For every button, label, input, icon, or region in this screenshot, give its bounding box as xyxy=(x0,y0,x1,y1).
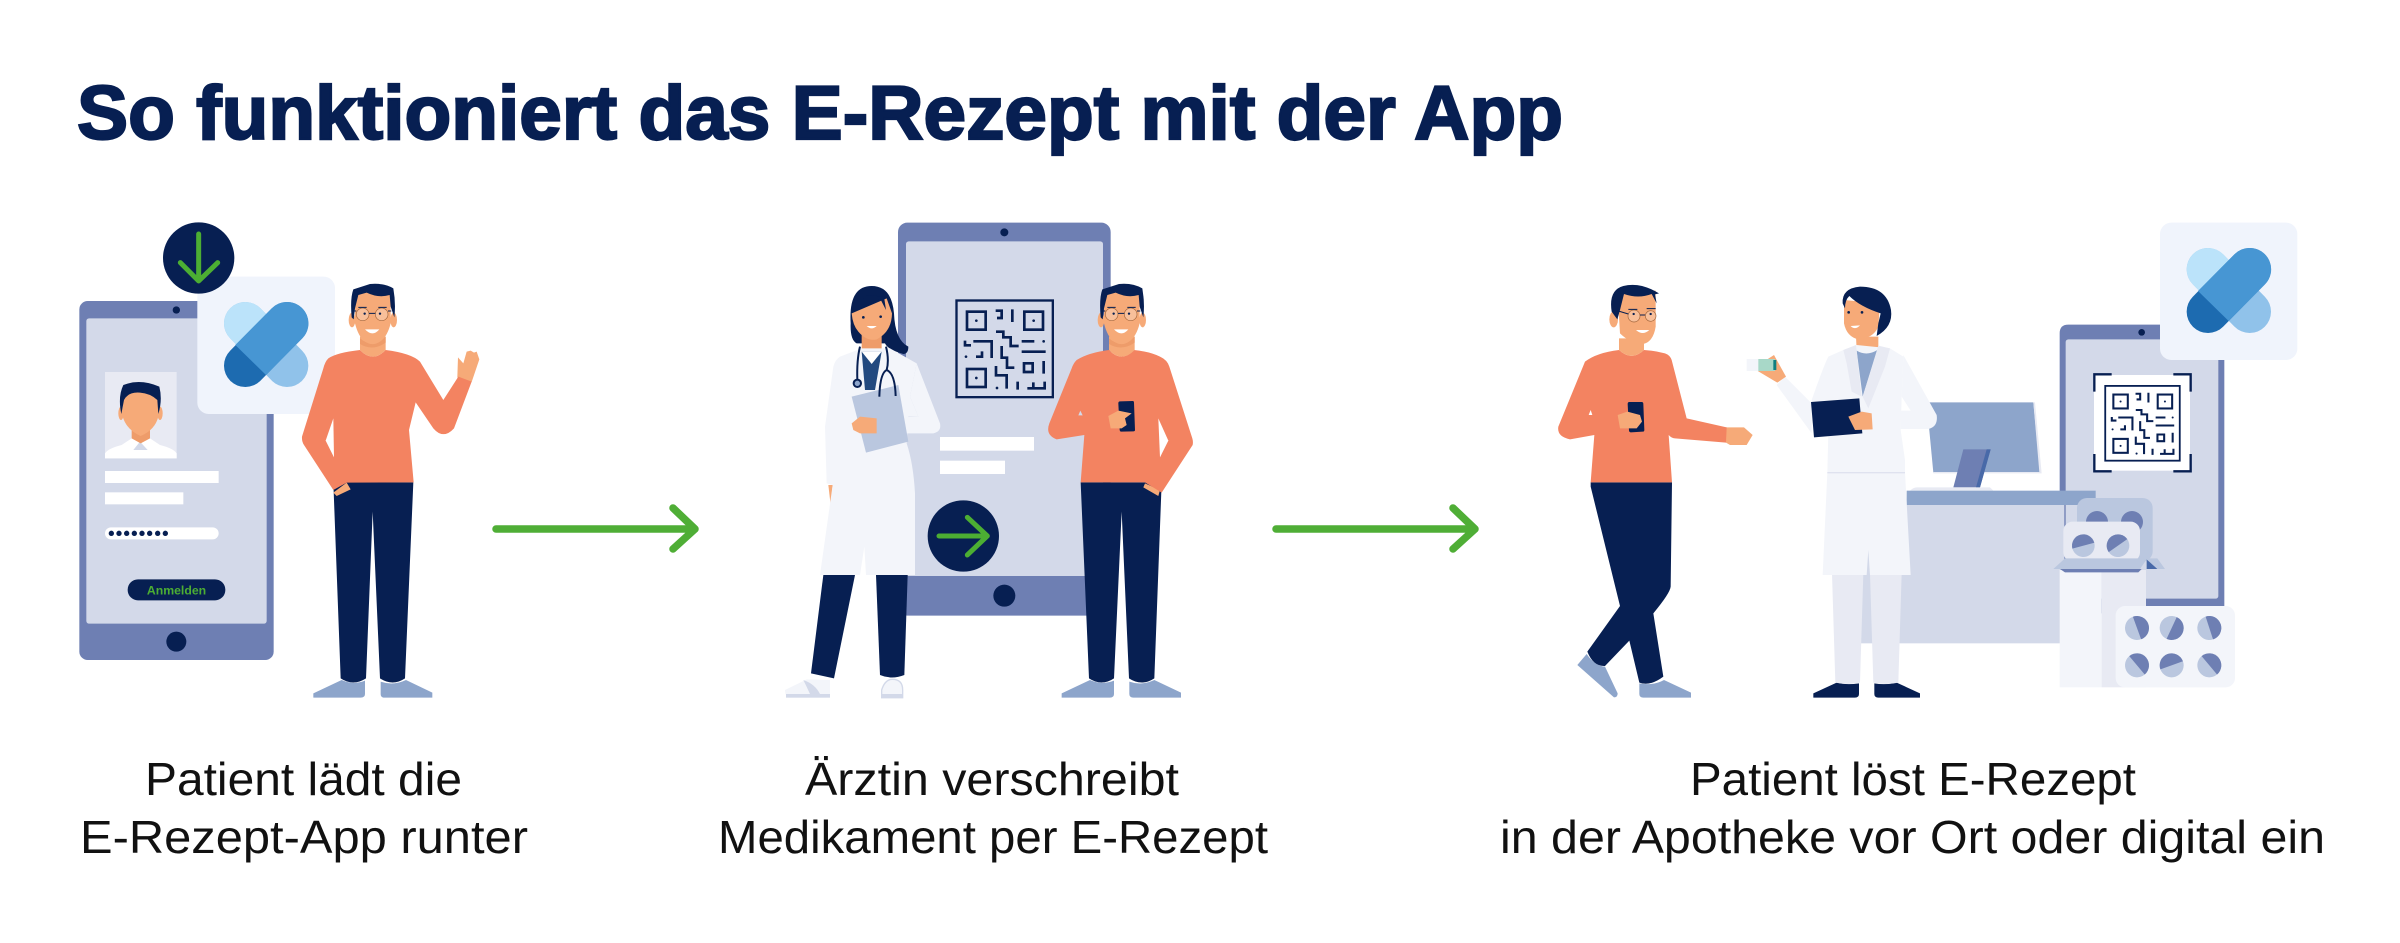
caption: step 2 xyxy=(718,753,1268,863)
desk xyxy=(1861,491,2096,643)
icon: next arrow xyxy=(928,500,999,572)
panel: step 2 doctor prescribes xyxy=(785,223,1193,698)
pharmacy phone with QR code xyxy=(2060,325,2224,613)
arrow: step 2 to step 3 xyxy=(1276,508,1475,549)
monitor xyxy=(1910,402,2042,491)
figure: pharmacist xyxy=(1747,287,1937,698)
login button xyxy=(128,579,225,600)
icon: download arrow xyxy=(163,222,234,294)
medicine pack in hand xyxy=(1747,359,1776,371)
figure: doctor xyxy=(785,286,940,698)
login button: Anmelden xyxy=(147,583,206,597)
caption: step 2: Medikament per E-Rezept xyxy=(718,811,1268,863)
caption: step 3: Patient löst E-Rezept xyxy=(1690,753,2136,805)
caption: step 3: in der Apotheke vor Ort oder digital ein xyxy=(1500,811,2325,863)
caption: step 1: Patient lädt die xyxy=(145,753,462,805)
arrow: step 1 to step 2 xyxy=(496,508,695,549)
password field xyxy=(105,527,219,539)
caption: step 2: Ärztin verschreibt xyxy=(805,753,1179,805)
caption: step 3 xyxy=(1500,753,2325,863)
panel: step 3 people xyxy=(1558,285,1937,698)
icon: app tile xyxy=(197,277,335,414)
icon: app tile xyxy=(2160,223,2297,360)
figure: patient with phone xyxy=(1048,284,1193,698)
phone with login screen xyxy=(79,301,274,660)
figure: patient handing phone xyxy=(1558,285,1753,698)
panel: step 1 app download xyxy=(79,222,479,698)
panel: pharmacy scene xyxy=(1861,223,2297,687)
tablet with QR code xyxy=(898,223,1111,616)
stethoscope xyxy=(854,347,896,397)
caption: step 1 xyxy=(80,753,528,863)
caption: step 1: E-Rezept-App runter xyxy=(80,811,528,863)
medicine box and blisters xyxy=(2053,498,2235,687)
profile photo xyxy=(105,372,177,458)
title: So funktioniert das E-Rezept mit der App xyxy=(77,71,1563,156)
figure: waving patient xyxy=(302,284,479,698)
